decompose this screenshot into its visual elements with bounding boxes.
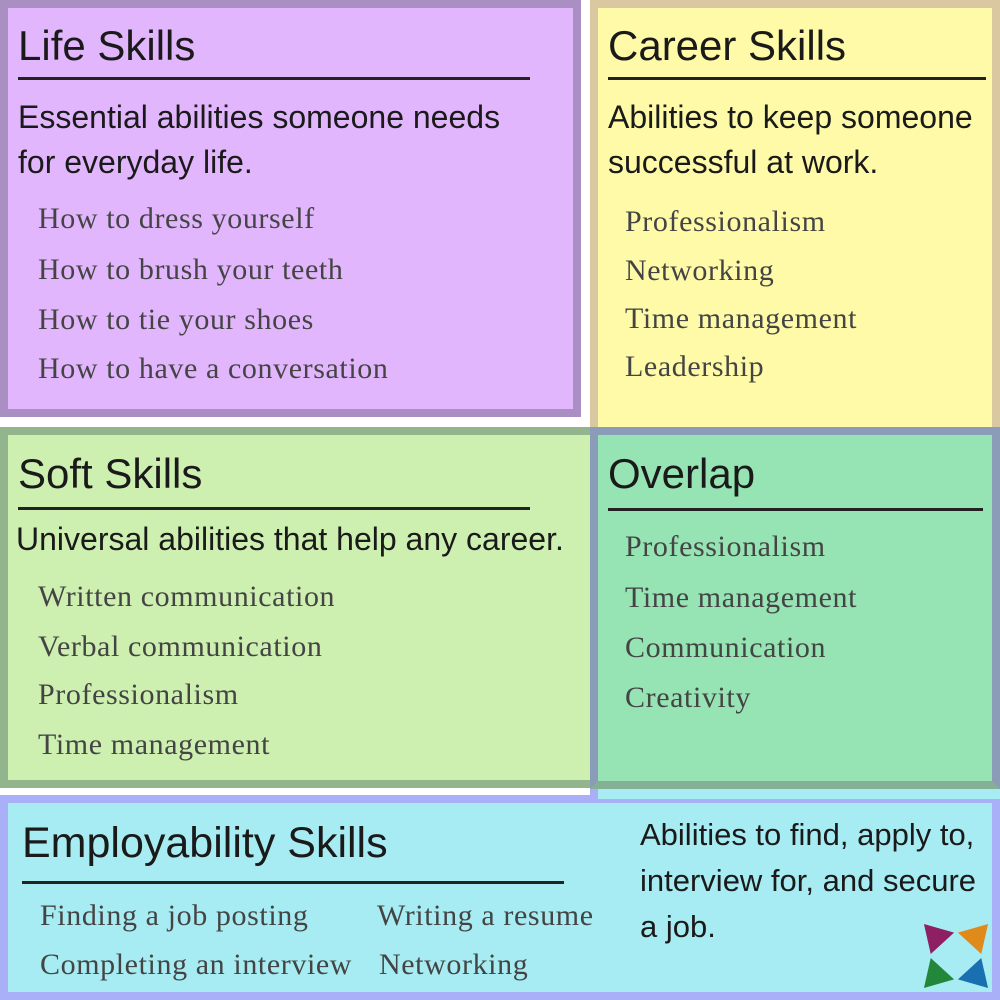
list: life skills: How to brush your teeth [38, 253, 343, 286]
list: soft skills: Written communication [38, 580, 335, 613]
panel: career skills [590, 0, 1000, 432]
heading: career skills: Career Skills [608, 22, 846, 69]
list: career skills [625, 205, 857, 383]
list: career skills: Professionalism [625, 205, 826, 238]
list: soft skills: Verbal communication [38, 630, 322, 663]
list: soft skills [38, 580, 335, 761]
text: life skills description: for everyday life. [18, 144, 253, 180]
list: career skills: Leadership [625, 350, 764, 383]
list: life skills [38, 202, 388, 385]
list: soft skills: Time management [38, 728, 270, 761]
list: overlap: Creativity [625, 681, 751, 714]
panel: soft skills [0, 427, 598, 788]
text: life skills description: Essential abilities someone needs [18, 99, 500, 135]
list: career skills: Time management [625, 302, 857, 335]
text: employability description: a job. [640, 909, 716, 944]
icon: logo [924, 924, 988, 988]
heading: life skills: Life Skills [18, 22, 195, 69]
text: career description: Abilities to keep someone [608, 99, 973, 135]
panel: employability skills [0, 795, 1000, 1000]
heading: employability skills: Employability Skills [22, 819, 388, 867]
text: employability description: Abilities to find, apply to, [640, 817, 974, 852]
text: soft description: Universal abilities that help any career. [16, 521, 564, 557]
text: career description: successful at work. [608, 144, 878, 180]
text: life skills description [18, 99, 500, 180]
panel: overlap lower joint [590, 789, 1000, 799]
list: life skills: How to tie your shoes [38, 303, 314, 336]
list: overlap: Professionalism [625, 530, 826, 563]
list: employability skills [40, 899, 594, 981]
heading: soft skills: Soft Skills [18, 450, 202, 497]
heading: overlap: Overlap [608, 450, 755, 497]
panel: life skills [0, 0, 581, 417]
text: career description [608, 99, 973, 180]
text: employability description [640, 817, 976, 944]
list: life skills: How to dress yourself [38, 202, 315, 235]
list: employability skills: Completing an interview [40, 948, 352, 981]
text: employability description: interview for, and secure [640, 863, 976, 898]
list: employability skills: Networking [379, 948, 528, 981]
panel: overlap [590, 427, 1000, 789]
list: overlap: Communication [625, 631, 826, 664]
list: overlap [625, 530, 857, 714]
list: soft skills: Professionalism [38, 678, 239, 711]
list: employability skills: Finding a job posting [40, 899, 308, 932]
list: employability skills: Writing a resume [377, 899, 594, 932]
list: career skills: Networking [625, 254, 774, 287]
list: overlap: Time management [625, 581, 857, 614]
list: life skills: How to have a conversation [38, 352, 388, 385]
